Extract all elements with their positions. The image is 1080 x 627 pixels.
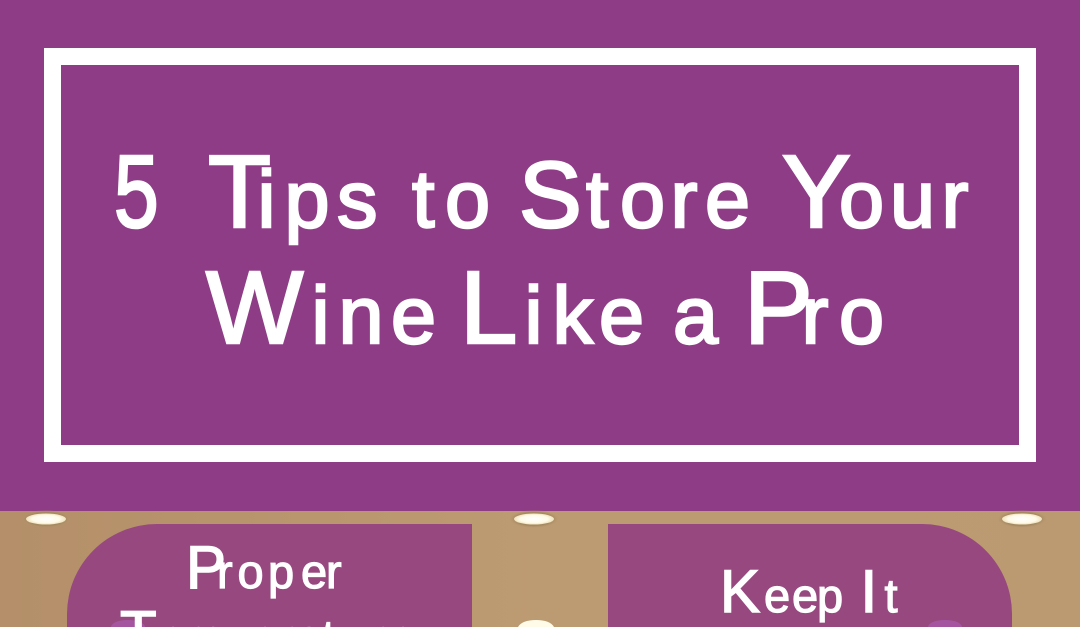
panel light reflection <box>111 620 145 627</box>
title frame <box>52 56 1028 454</box>
title: 5 <box>114 133 159 249</box>
panel: proper temperature <box>67 524 472 627</box>
title: Y <box>782 134 851 249</box>
panel heading: keep it: eep <box>764 569 843 622</box>
panel heading: keep it: K <box>720 558 760 625</box>
ceiling light 3 <box>997 510 1047 528</box>
title: to <box>412 155 490 245</box>
title: T <box>208 134 271 249</box>
ceiling light 1 <box>21 510 71 528</box>
title: L <box>460 250 517 365</box>
title: W <box>206 250 303 365</box>
title: ine <box>312 271 436 361</box>
ceiling photo background <box>0 510 1080 627</box>
title <box>114 133 968 365</box>
ceiling light 2 <box>509 510 559 528</box>
title: S <box>519 142 582 247</box>
panel heading: proper temperature: roper <box>217 545 342 598</box>
ceiling light 4 <box>518 620 554 627</box>
title: a <box>673 271 719 361</box>
panel light reflection <box>928 620 962 627</box>
title: our <box>839 155 968 245</box>
title: ike <box>524 271 644 361</box>
panel heading: proper temperature: P <box>186 534 226 601</box>
title: ips <box>258 155 378 245</box>
title: ro <box>802 271 884 361</box>
panel heading: keep it: t <box>884 569 898 622</box>
panel heading: keep it: I <box>860 558 877 625</box>
title: tore <box>586 155 750 245</box>
panel heading: proper temperature <box>120 546 404 627</box>
panel: keep it <box>608 524 1012 627</box>
panel heading: keep it <box>724 570 898 623</box>
title: P <box>744 250 813 365</box>
